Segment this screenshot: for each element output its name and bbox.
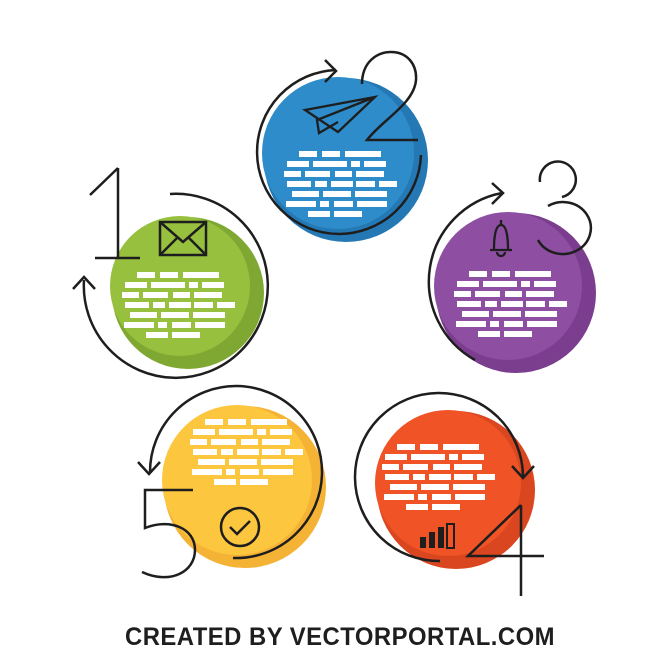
panel: step 1 green	[73, 168, 268, 378]
credit text: CREATED BY VECTORPORTAL.COM	[125, 623, 555, 651]
number 4	[468, 505, 544, 596]
arrow: step 4	[355, 393, 534, 561]
number 2	[362, 52, 418, 140]
number 3	[538, 161, 591, 254]
icon: envelope	[160, 222, 206, 255]
panel: step 5 yellow	[138, 386, 326, 577]
icon: check	[221, 508, 259, 546]
icon: signal bars	[420, 524, 454, 548]
arrow: step 1	[73, 194, 268, 378]
number 1	[90, 168, 140, 258]
arrow: step 5	[138, 386, 322, 558]
panel: step 2 blue	[257, 52, 428, 242]
icon: paper plane	[305, 97, 375, 133]
panel: step 4 orange	[355, 393, 544, 596]
panel: step 3 purple	[429, 161, 596, 373]
number 5	[142, 490, 195, 577]
icon: bell	[490, 220, 512, 256]
arrow: step 3	[429, 183, 503, 360]
arrow: step 2	[257, 60, 421, 234]
